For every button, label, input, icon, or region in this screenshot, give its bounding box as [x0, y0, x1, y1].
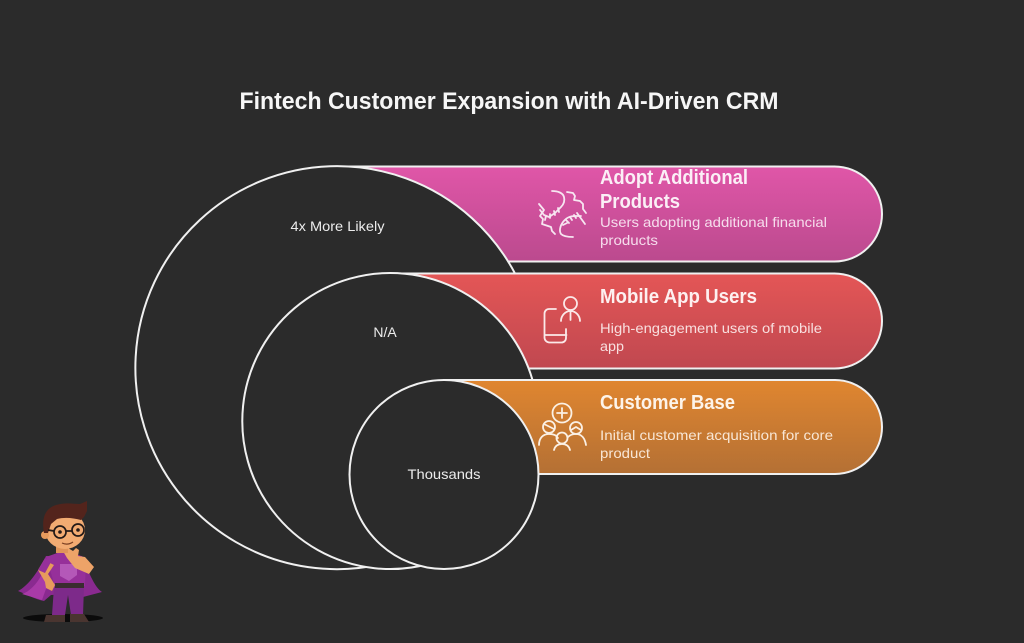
icon: customer group [539, 404, 586, 450]
description: products [600, 232, 658, 248]
neck and head [56, 542, 68, 553]
panel: mobile app users [390, 274, 882, 368]
circle: thousands [350, 380, 538, 569]
right arm and hand [63, 548, 94, 574]
description: Initial customer acquisition for core [600, 427, 833, 443]
heading: Mobile App Users [600, 286, 757, 308]
cape [18, 556, 102, 601]
circle: N/A: N/A [373, 324, 397, 340]
description: Users adopting additional financial [600, 214, 827, 230]
panel: customer base [444, 380, 882, 474]
circle: 4x more likely: 4x More Likely [290, 218, 384, 234]
description: High-engagement users of mobile [600, 320, 822, 336]
title: Fintech Customer Expansion with AI-Driven CRM [240, 88, 778, 115]
circle: 4x more likely [135, 166, 539, 569]
left arm [38, 560, 55, 591]
legs [52, 587, 84, 615]
heading: Adopt Additional [600, 167, 748, 189]
circle: thousands: Thousands [408, 466, 480, 482]
heading: Products [600, 191, 680, 213]
glasses [48, 524, 84, 538]
description: product [600, 445, 650, 461]
circle: N/A [242, 273, 539, 569]
description: app [600, 338, 624, 354]
torso [46, 552, 86, 586]
icon: joined hands [539, 191, 586, 237]
mascot: superhero character [18, 501, 103, 622]
icon: mobile user [544, 297, 580, 342]
hair [43, 501, 87, 533]
panel: adopt additional products [338, 166, 882, 262]
heading: Customer Base [600, 392, 735, 414]
